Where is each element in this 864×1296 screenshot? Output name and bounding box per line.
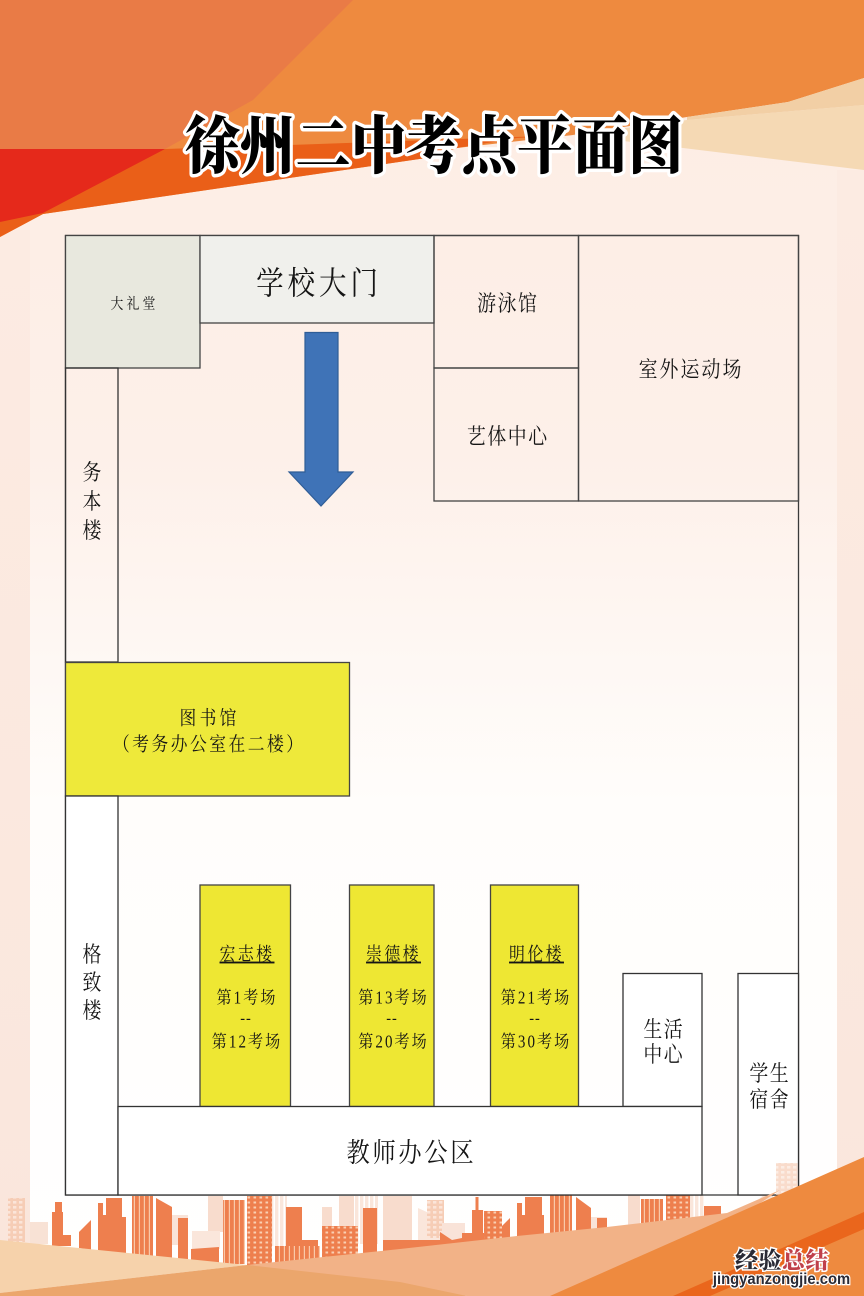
building: Wuben block — [66, 368, 118, 662]
building: Gezhi block: 楼 — [83, 999, 102, 1023]
building: Minglun block, rooms 21 to 30: 明伦楼 — [509, 944, 564, 965]
building: outdoor sports ground — [578, 236, 798, 501]
building: Minglun block, rooms 21 to 30: 第30考场 — [501, 1031, 571, 1052]
building: teachers' office area: 教师办公区 — [346, 1138, 476, 1168]
arrow: entrance direction — [289, 332, 353, 506]
building: Hongzhi block, rooms 1 to 12: 宏志楼 — [220, 944, 274, 965]
building: Chongde block, rooms 13 to 20: 第20考场 — [358, 1031, 429, 1052]
building: Chongde block, rooms 13 to 20 — [350, 885, 434, 1106]
building: library, highlighted: 图书馆 — [180, 707, 240, 729]
building: student dormitory: 学生 — [749, 1062, 790, 1086]
building: Hongzhi block, rooms 1 to 12: -- — [240, 1009, 252, 1027]
building: swimming hall: 游泳馆 — [477, 292, 538, 316]
title: 徐州二中考点平面图 — [185, 112, 683, 182]
building: auditorium — [66, 236, 200, 368]
building: Hongzhi block, rooms 1 to 12 — [200, 885, 290, 1106]
building: Wuben block: 务 — [83, 461, 101, 485]
building: student dormitory — [738, 974, 798, 1195]
watermark: jingyanzongjie.com — [712, 1271, 850, 1288]
building: library, highlighted: （考务办公室在二楼） — [113, 733, 305, 755]
building: student dormitory: 宿舍 — [749, 1088, 790, 1112]
building: Gezhi block: 致 — [83, 971, 101, 995]
building: Hongzhi block, rooms 1 to 12: 第1考场 — [217, 987, 277, 1008]
building: outdoor sports ground: 室外运动场 — [639, 358, 743, 382]
building: living centre: 中心 — [643, 1043, 684, 1067]
building: teachers' office area — [118, 1106, 702, 1195]
building: Chongde block, rooms 13 to 20: 崇德楼 — [366, 944, 421, 965]
building: Wuben block: 本 — [83, 490, 101, 514]
building: library, highlighted — [66, 662, 350, 796]
building: arts and sports centre: 艺体中心 — [467, 425, 549, 449]
building: auditorium: 大礼堂 — [111, 295, 158, 313]
top banner: layered orange shapes — [0, 0, 864, 237]
skyline building behind dormitory corner — [776, 1163, 798, 1195]
bottom banner: layered orange shapes — [0, 1157, 864, 1296]
building: Minglun block, rooms 21 to 30 — [490, 885, 578, 1106]
building: arts and sports centre — [434, 368, 578, 501]
building: Gezhi block — [66, 796, 118, 1195]
building: living centre: 生活 — [643, 1018, 684, 1042]
building: school gate — [200, 236, 434, 323]
building: Minglun block, rooms 21 to 30: -- — [529, 1009, 541, 1027]
building: Chongde block, rooms 13 to 20: -- — [386, 1009, 398, 1027]
watermark — [712, 1248, 850, 1288]
building: Chongde block, rooms 13 to 20: 第13考场 — [358, 987, 429, 1008]
floor plan map — [66, 236, 798, 1195]
campus outline — [66, 236, 798, 1195]
building: Minglun block, rooms 21 to 30: 第21考场 — [501, 987, 571, 1008]
building: swimming hall — [434, 236, 578, 368]
building: school gate: 学校大门 — [256, 266, 382, 302]
bottom city skyline — [0, 1187, 773, 1266]
building: living centre — [623, 974, 702, 1106]
building: Wuben block: 楼 — [83, 519, 102, 543]
building: Hongzhi block, rooms 1 to 12: 第12考场 — [212, 1031, 282, 1052]
building: Gezhi block: 格 — [83, 943, 101, 967]
watermark: 经验总结 — [735, 1248, 829, 1273]
